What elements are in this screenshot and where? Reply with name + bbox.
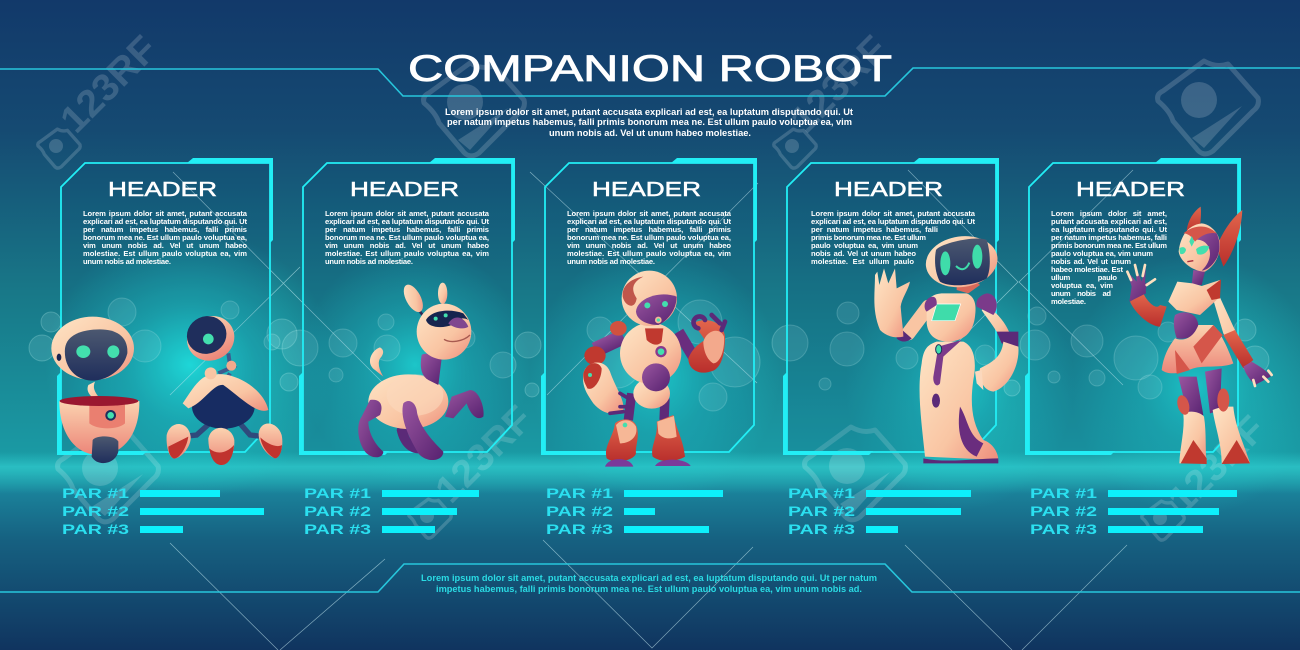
panel 3 parameters: PAR #1 [546, 486, 614, 501]
watermarks [38, 28, 1274, 540]
panel 1 parameters: PAR #3 [62, 522, 130, 537]
panel 4 text: Lorem ipsum dolor sit amet, putant accusata [811, 209, 976, 218]
panel 2 parameters: PAR #2 [304, 504, 371, 519]
panel 4 frame [783, 158, 999, 455]
panel 3 text: unum nobis ad molestiae. [567, 257, 655, 266]
panel 5 parameters: PAR #1 [1030, 486, 1098, 501]
panel 4 text: paulo voluptua ea, vim unum [811, 241, 918, 250]
panel 1 header: HEADER [108, 179, 217, 201]
floor light band [0, 452, 1300, 494]
panel 3 [541, 158, 757, 537]
panel 2 header: HEADER [350, 179, 459, 201]
footer text: Lorem ipsum dolor sit amet, putant accusata explicari ad est, ea luptatum disputando qui. Ut per natum [421, 573, 877, 584]
panel 3 frame [541, 158, 757, 455]
panel 1 text: unum nobis ad molestiae. [83, 257, 171, 266]
footer text: impetus habemus, falli primis bonorum mea ne. Est ullum paulo voluptua ea, vim unum nobis ad. [436, 584, 862, 595]
panel 5 text: per natum impetus habemus, falli [1051, 233, 1167, 242]
panel 2 parameters [304, 486, 479, 537]
panel 4 text: molestiae. Est ullum paulo [811, 257, 914, 266]
panel 3 parameters: PAR #2 [546, 504, 613, 519]
panel 1 frame [57, 158, 273, 455]
intro text: Lorem ipsum dolor sit amet, putant accusata explicari ad est, ea luptatum disputando qui. Ut [445, 107, 854, 118]
panel 4 [783, 158, 1019, 537]
title: COMPANION ROBOT [408, 48, 892, 89]
panel 2 text: Lorem ipsum dolor sit amet, putant accusata [325, 209, 490, 218]
panel 2 text: vim unum nobis ad. Vel ut unum habeo [325, 241, 489, 250]
panel 3 text: Lorem ipsum dolor sit amet, putant accusata [567, 209, 732, 218]
panel 5 robot: female android [1127, 207, 1272, 464]
panel 2 text [325, 209, 490, 266]
panel 2 text: per natum impetus habemus, falli primis [325, 225, 489, 234]
panel 1 text: Lorem ipsum dolor sit amet, putant accusata [83, 209, 248, 218]
panel 2 frame [299, 158, 515, 455]
panel 4 text [811, 209, 976, 266]
panel 5 [1025, 158, 1272, 537]
panel 5 text: putant accusata explicari ad est, [1051, 217, 1167, 226]
panel 5 frame [1025, 158, 1241, 455]
panel 2 text: unum nobis ad molestiae. [325, 257, 413, 266]
panel 1 parameters [62, 486, 264, 537]
thin diagonal lattice lines [170, 170, 1133, 650]
intro text [445, 107, 854, 139]
panel 5 text: nobis ad. Vel ut unum [1051, 257, 1131, 266]
panel 1 text: bonorum mea ne. Est ullum paulo voluptua ea, [83, 233, 247, 242]
panel 4 robot: assistant [874, 232, 1019, 463]
panel 3 text: explicari ad est, ea luptatum disputando qui. Ut [567, 217, 731, 226]
panel 3 robot: humanoid [583, 271, 725, 467]
intro text: unum nobis ad. Vel ut unum habeo molestiae. [549, 128, 751, 139]
panel 4 text: nobis ad. Vel ut unum habeo [811, 249, 916, 258]
panel 4 text: explicari ad est, ea luptatum disputando qui. Ut [811, 217, 975, 226]
panel 3 parameters: PAR #3 [546, 522, 614, 537]
panel 4 parameters: PAR #1 [788, 486, 856, 501]
panel 5 text: primis bonorum mea ne. Est ullum [1051, 241, 1167, 250]
glows behind robots [45, 230, 1300, 515]
panel 4 parameters: PAR #2 [788, 504, 855, 519]
bottom connector line [0, 564, 1300, 592]
panel 5 text: molestiae. [1051, 297, 1086, 306]
panel 2 parameters: PAR #3 [304, 522, 372, 537]
panel 5 text: Lorem ipsum dolor sit amet, [1051, 209, 1167, 218]
footer text [421, 573, 877, 595]
panel 2 text: bonorum mea ne. Est ullum paulo voluptua ea, [325, 233, 489, 242]
panel 1 text: per natum impetus habemus, falli primis [83, 225, 247, 234]
watermarks: 123RF [783, 28, 896, 141]
panel 4 header: HEADER [834, 179, 943, 201]
panel 5 text: voluptua ea, vim [1051, 281, 1113, 290]
panel 5 parameters: PAR #3 [1030, 522, 1098, 537]
panel 5 text: ullum paulo [1051, 273, 1117, 282]
panel 3 text: vim unum nobis ad. Vel ut unum habeo [567, 241, 731, 250]
panel 5 parameters [1030, 486, 1237, 537]
panel 1 text [83, 209, 248, 266]
panel 5 parameters: PAR #2 [1030, 504, 1097, 519]
panel 3 parameters [546, 486, 723, 537]
panel 2 parameters: PAR #1 [304, 486, 372, 501]
panel 4 text: primis bonorum mea ne. Est ullum [811, 233, 926, 242]
panel 1 parameters: PAR #2 [62, 504, 129, 519]
panel 2 text: molestiae. Est ullum paulo voluptua ea, vim [325, 249, 489, 258]
panel 2 text: explicari ad est, ea luptatum disputando qui. Ut [325, 217, 489, 226]
panel 5 text: habeo molestiae. Est [1051, 265, 1123, 274]
panel 5 text [1051, 209, 1167, 306]
watermarks: 123RF [428, 398, 541, 511]
panel 1 parameters: PAR #1 [62, 486, 130, 501]
panel 5 text: paulo voluptua ea, vim unum [1051, 249, 1153, 258]
panel 5 text: unum nobis ad [1051, 289, 1111, 298]
panel 4 parameters [788, 486, 971, 537]
panel 1 [51, 158, 282, 537]
watermarks: 123RF [1161, 408, 1274, 521]
intro text: per natum impetus habemus, falli primis bonorum mea ne. Est ullum paulo voluptua ea, vim [447, 117, 852, 128]
panel 3 text: per natum impetus habemus, falli primis [567, 225, 731, 234]
panel 3 text [567, 209, 732, 266]
panel 1 text: vim unum nobis ad. Vel ut unum habeo [83, 241, 247, 250]
panel 4 parameters: PAR #3 [788, 522, 856, 537]
panel 5 header: HEADER [1076, 179, 1185, 201]
panel 3 header: HEADER [592, 179, 701, 201]
panel 4 text: per natum impetus habemus, falli [811, 225, 938, 234]
panel 3 text: bonorum mea ne. Est ullum paulo voluptua ea, [567, 233, 731, 242]
panel 1 text: molestiae. Est ullum paulo voluptua ea, vim [83, 249, 247, 258]
watermarks: 123RF [53, 28, 166, 141]
bubbles [29, 298, 1269, 411]
panel 3 text: molestiae. Est ullum paulo voluptua ea, vim [567, 249, 731, 258]
panel 2 robot: dog [358, 282, 484, 460]
panel 2 [299, 158, 515, 537]
panel 5 text: ea luptatum disputando qui. Ut [1051, 225, 1167, 234]
top connector line [0, 68, 1300, 96]
panel 1 text: explicari ad est, ea luptatum disputando qui. Ut [83, 217, 247, 226]
panel 1 robot: four-legged [167, 308, 282, 465]
panel 1 robot: head on bowl [51, 317, 139, 463]
